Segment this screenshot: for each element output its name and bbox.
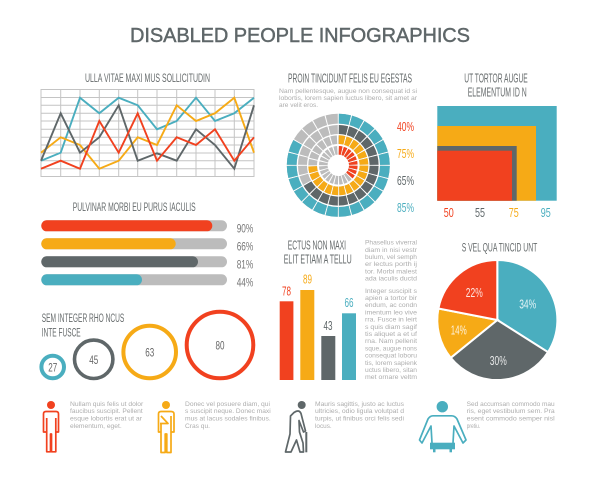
text block: bar chart notes: rna. Nam pellenit [365, 339, 417, 345]
text block: bar chart notes: endum, ac condn [365, 303, 417, 309]
panel: bar chart [280, 238, 356, 380]
text block: bar chart notes: er lectus porth ij [365, 262, 417, 268]
column: 43 [321, 318, 335, 380]
text block: bar chart notes: consequat loboru [365, 354, 417, 360]
ring: 63: 63 [145, 346, 154, 360]
text block: bar chart notes: bulum, vel semph [365, 255, 417, 261]
series: yellow line [41, 98, 254, 169]
icon: person with arm sling [158, 401, 174, 452]
pie labels [451, 285, 536, 368]
chart grid [41, 89, 254, 177]
text block: bar chart notes: tor. Morbi malest [365, 270, 417, 276]
text block: bar chart notes: met ornare veltm [365, 375, 417, 381]
icon: amputee person [44, 401, 58, 452]
bar: 81% [41, 256, 254, 272]
heading: bar chart: ECTUS NON MAXI [288, 238, 346, 252]
pie labels: 22% [466, 285, 483, 300]
bar: 44%: 44% [237, 276, 254, 290]
text block: person one: Nullam quis felis ut dolor [70, 402, 143, 408]
radial chart intro text: lobortis, lorem sapien luctus libero, sit amet ar [279, 96, 417, 102]
radial legend: 65% [397, 173, 414, 188]
text block: bar chart notes: tis aliquet a et uf [365, 332, 417, 338]
text block: person three: Mauris sagittis, justo ac luctus [315, 402, 404, 408]
ring: 27 [41, 356, 64, 378]
ring: 80: 80 [216, 338, 225, 352]
radial legend: 40% [397, 119, 414, 134]
column: 78 [280, 284, 293, 380]
text block: bar chart notes: Phasellus viverral [365, 240, 417, 246]
panel: line chart [41, 73, 254, 177]
text block: person three: turpis, ut finibus orci felis sedi [315, 416, 404, 422]
radial chart intro text: Nam pellentesque, augue non consequat id si [279, 89, 417, 95]
heading: progress bars: PULVINAR MORBI EU PURUS IACULIS [73, 202, 196, 214]
bar: 66%: 66% [237, 240, 254, 254]
text block: person two [185, 402, 271, 430]
bar: 90%: 90% [237, 222, 254, 236]
radial legend: 85% [397, 200, 414, 215]
bar: 66% [41, 238, 254, 254]
panel: nested squares [437, 72, 557, 220]
text block: person three: ultricies, odio ligula volutpat d [315, 409, 404, 415]
heading: nested squares: ELEMENTUM ID N [468, 86, 527, 100]
square labels [444, 205, 551, 220]
text block: person four: pretiu. [467, 424, 480, 430]
text block: person three [315, 402, 404, 430]
column: 89 [300, 272, 314, 380]
panel: progress bars [41, 202, 254, 290]
column: 89: 89 [303, 272, 312, 286]
column: 66 [342, 295, 356, 380]
panel: radial chart [279, 72, 417, 215]
ring: 63 [123, 326, 176, 378]
heading: pie chart: S VEL QUA TINCID UNT [462, 242, 537, 254]
ring: 80 [187, 312, 253, 378]
column: 78: 78 [282, 284, 291, 298]
text block: bar chart notes: s quis diam sagif [365, 325, 417, 331]
pie slice: 34% [497, 260, 557, 352]
text block: person one: faucibus suscipit. Pellent [70, 409, 143, 415]
square: 95 [437, 106, 557, 201]
series: red line [41, 113, 254, 169]
text block: person four: ris, eget vestibulum sem. Pra [467, 409, 555, 415]
pie slice: 30% [451, 320, 548, 380]
radial legend [397, 119, 414, 215]
bar: 44% [41, 274, 254, 290]
text block: person one: esque lobortis erat ut ar [70, 416, 142, 422]
square: 75 [437, 126, 536, 201]
text block: person four: esent commodo semper nisl [467, 416, 555, 422]
column: 66: 66 [344, 295, 354, 310]
radial legend: 75% [397, 146, 414, 161]
text block: bar chart notes: diam in nisi vestr [365, 248, 417, 254]
square labels: 95 [541, 205, 551, 220]
radial chart intro text [279, 89, 417, 109]
text block: bar chart notes: rra. Fusce in leirt [365, 318, 417, 324]
heading: line chart: ULLA VITAE MAXI MUS SOLLICITUDIN [85, 73, 210, 85]
text block: person four [467, 402, 555, 430]
heading: radial chart: PROIN TINCIDUNT FELIS EU EGESTAS [288, 72, 412, 86]
heading: ring sizes [42, 313, 124, 340]
text block: bar chart notes: tis, lorem sapienk [365, 361, 418, 367]
heading: nested squares: UT TORTOR AUGUE [464, 72, 528, 86]
square labels: 55 [475, 205, 485, 220]
text block: bar chart notes: Integer suscipit s [365, 289, 417, 295]
pie labels: 30% [490, 353, 507, 368]
series: grey line [41, 105, 254, 169]
square: 55 [437, 146, 517, 201]
text block: person two: Donec vel posuere diam, qui [185, 402, 270, 408]
heading: bar chart: ELIT ETIAM A TELLU [284, 252, 352, 266]
icon: person in wheelchair [420, 401, 466, 452]
heading: nested squares [464, 72, 528, 100]
text block: person one: elementum, eget. [70, 424, 122, 430]
text block: person four: Sed accumsan commodo mau [467, 402, 555, 408]
text block: bar chart notes: uctus libero, sitan [365, 368, 417, 374]
panel: pie chart [437, 242, 557, 380]
heading: bar chart [284, 238, 352, 266]
square labels: 75 [509, 205, 519, 220]
radial chart intro text: are velit eros. [279, 103, 318, 109]
title: DISABLED PEOPLE INFOGRAPHICS [130, 25, 470, 47]
column: 43: 43 [324, 318, 332, 333]
text block: person two: mus at lacus sodales finibus. [185, 416, 271, 422]
text block: bar chart notes: sque, augue nons [365, 346, 417, 352]
bar: 81%: 81% [237, 258, 254, 272]
text block: bar chart notes: ada iaculis ductd [365, 276, 417, 282]
text block: person two: s suscipit neque. Donec maxi [185, 409, 271, 415]
pie slice: 22% [438, 260, 497, 320]
bar: 90% [41, 220, 254, 236]
square: 50 [437, 151, 512, 201]
text block: bar chart notes: imentum leo vive [365, 310, 418, 316]
text block: bar chart notes [365, 240, 418, 381]
square labels: 50 [444, 205, 454, 220]
pie labels: 14% [451, 322, 467, 338]
text block: person one [70, 402, 143, 430]
heading: ring sizes: SEM INTEGER RHO NCUS [42, 313, 124, 325]
text block: person three: locus. [315, 424, 332, 430]
heading: ring sizes: INTE FUSCE [42, 328, 81, 340]
ring: 45 [74, 340, 113, 378]
series: teal line [41, 98, 254, 161]
pie slice: 14% [437, 308, 497, 358]
pie labels: 34% [519, 296, 536, 312]
radial rings [292, 119, 385, 212]
text block: bar chart notes: apien a tortor bir [365, 296, 417, 302]
panel: ring sizes [41, 312, 253, 378]
ring: 27: 27 [48, 360, 57, 374]
icon: elderly person with cane [286, 401, 306, 452]
text block: person two: Cras qu. [185, 424, 210, 430]
ring: 45: 45 [89, 353, 98, 367]
